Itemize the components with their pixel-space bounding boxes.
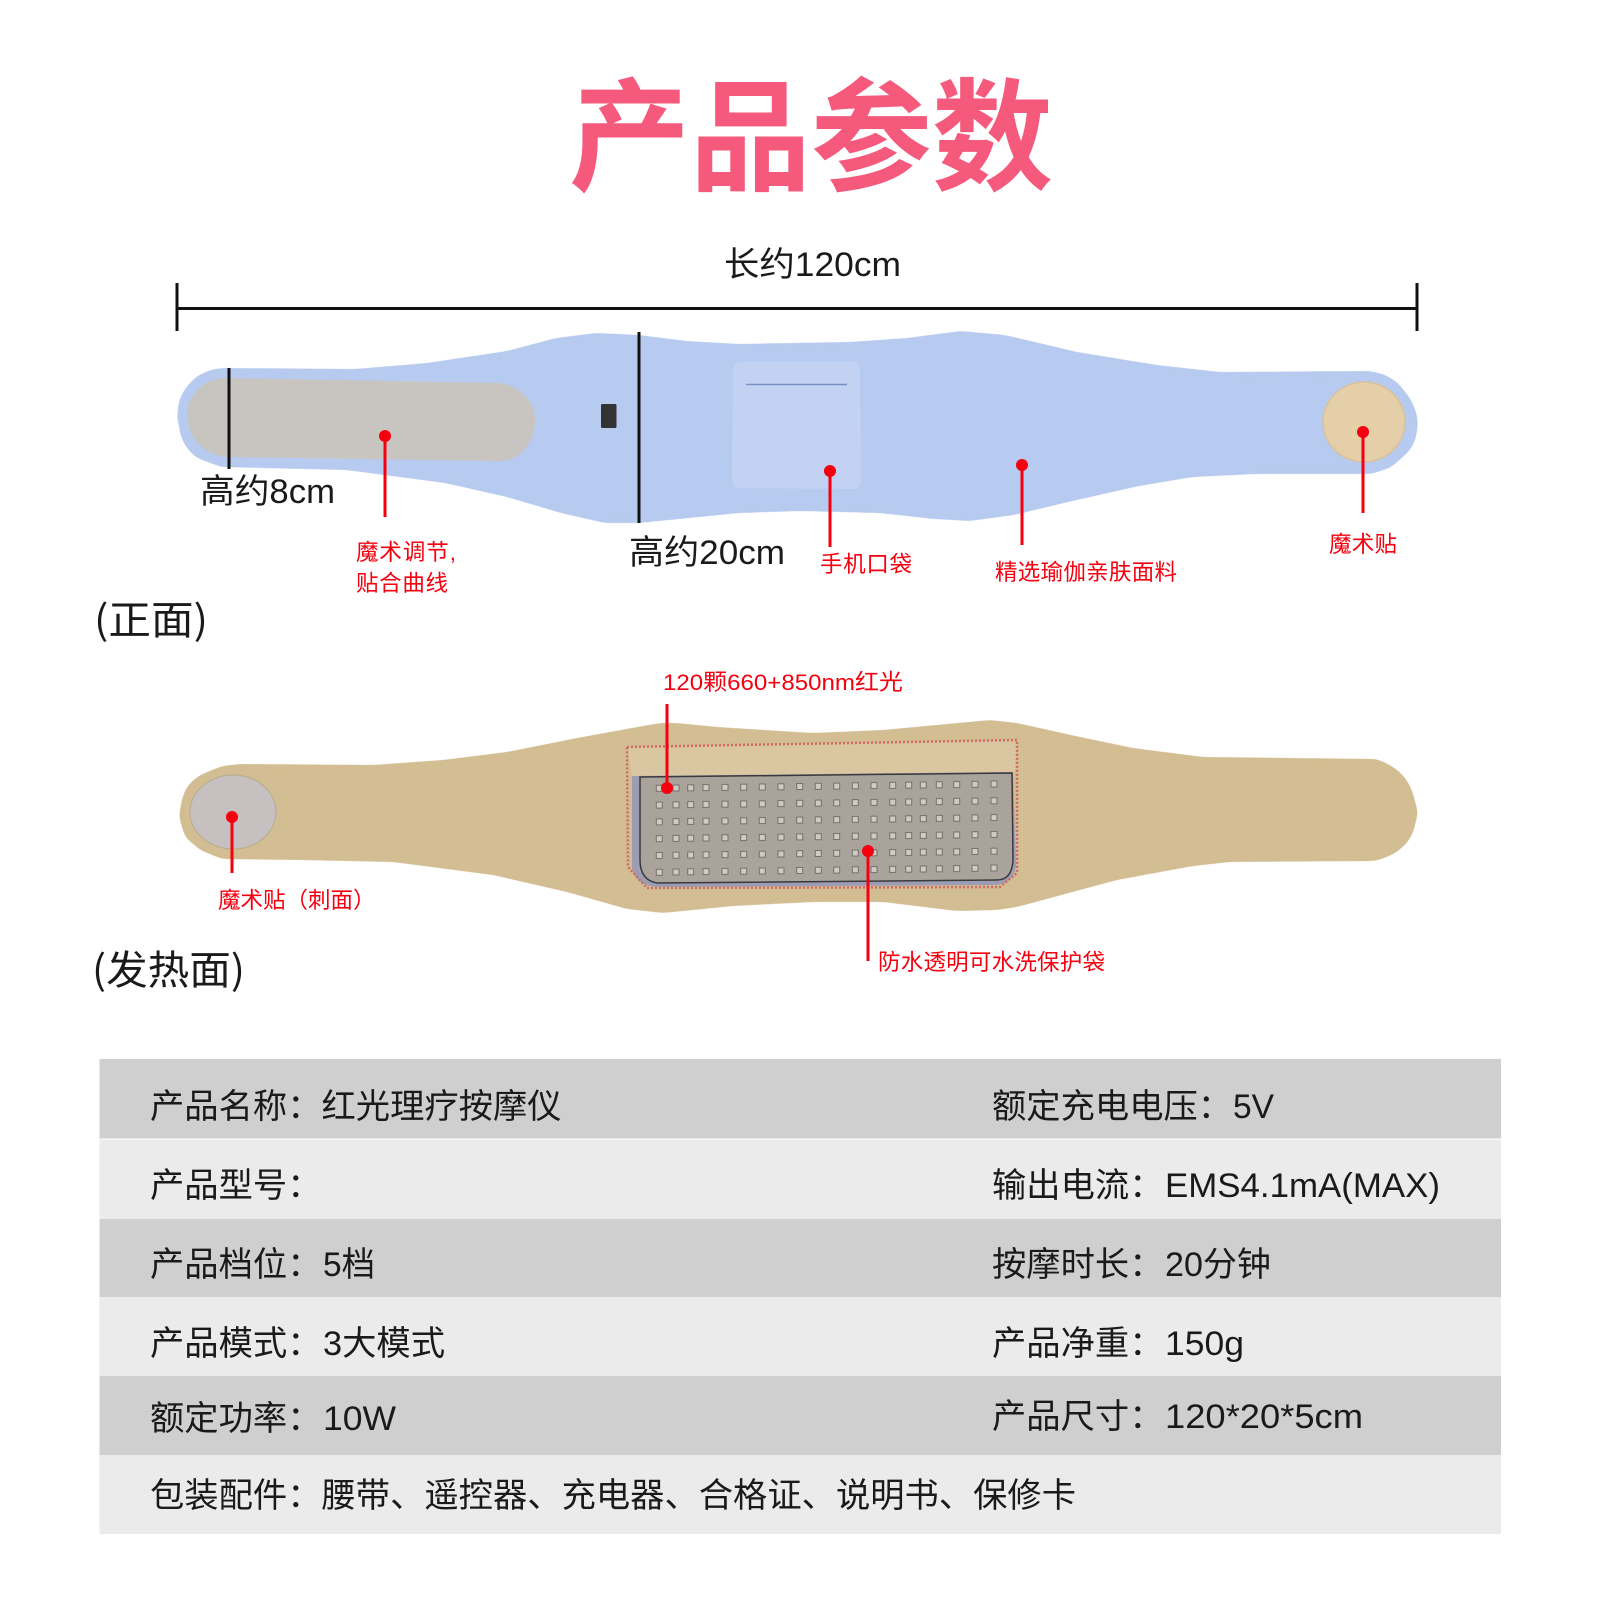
label: strap height: 高约8cm — [200, 473, 335, 511]
row 5 right: 120*20*5cm — [1165, 1398, 1363, 1436]
callout: yoga fabric — [995, 459, 1177, 585]
row 5 right — [992, 1398, 1363, 1436]
row 3 right: 按摩时长： — [992, 1246, 1164, 1284]
LED panel — [640, 773, 1013, 883]
height marker: centre — [638, 332, 640, 523]
row 5 left: 额定功率： — [150, 1400, 322, 1438]
row 2 left: 产品型号： — [150, 1167, 322, 1205]
height marker: strap — [228, 368, 230, 469]
row 3 left: 5档 — [323, 1246, 375, 1284]
table row backgrounds — [100, 1059, 1501, 1534]
callout: phone pocket: 手机口袋 — [820, 552, 912, 577]
heading: heating side: (发热面) — [92, 938, 245, 996]
waterproof pocket backing — [632, 772, 1016, 887]
callout: velcro strap: 贴合曲线 — [356, 571, 448, 596]
heading: front side: (正面) — [94, 588, 208, 646]
belt body: back — [179, 720, 1418, 913]
row 3 right — [992, 1246, 1271, 1284]
row 2 right — [992, 1167, 1440, 1205]
row 4 right: 产品净重： — [992, 1325, 1164, 1363]
callout: red light LEDs: 120颗660+850nm红光 — [663, 670, 903, 695]
dimension: overall length — [177, 246, 1417, 331]
callout: waterproof pocket: 防水透明可水洗保护袋 — [878, 950, 1105, 975]
row 5 left: 10W — [323, 1400, 397, 1438]
callout: waterproof pocket — [862, 845, 1105, 975]
gray hook patch — [190, 775, 276, 849]
callout: phone pocket — [820, 465, 912, 577]
callout: hook patch — [218, 811, 376, 913]
pocket stitching — [627, 740, 1017, 888]
callout: round velcro — [1329, 426, 1397, 557]
phone pocket — [732, 362, 861, 489]
callout: velcro strap: 魔术调节, — [356, 540, 456, 565]
callout: round velcro: 魔术贴 — [1329, 532, 1397, 557]
row 1 right: 5V — [1233, 1088, 1274, 1126]
callout: yoga fabric: 精选瑜伽亲肤面料 — [995, 560, 1177, 585]
row 4 right: 150g — [1165, 1325, 1244, 1363]
row 1 right: 额定充电电压： — [992, 1088, 1232, 1126]
label: centre height: 高约20cm — [629, 534, 785, 572]
row 4 right — [992, 1325, 1244, 1363]
LED grid — [656, 781, 997, 875]
row 4 left: 3大模式 — [323, 1325, 445, 1363]
row 3 right: 20分钟 — [1165, 1246, 1271, 1284]
row 5 right: 产品尺寸： — [992, 1398, 1164, 1436]
title: 产品参数 — [569, 40, 1053, 217]
front belt illustration — [177, 331, 1418, 523]
row 4 left — [150, 1325, 445, 1363]
control button — [601, 404, 616, 428]
panel outline — [640, 773, 1013, 883]
round velcro patch — [1323, 382, 1405, 462]
belt body: front — [177, 331, 1418, 523]
row 3 left: 产品档位： — [150, 1246, 322, 1284]
callout: hook patch: 魔术贴（刺面） — [218, 888, 376, 913]
row 1 left: 产品名称：红光理疗按摩仪 — [150, 1088, 562, 1126]
callout: velcro strap — [356, 430, 456, 596]
parameter table — [100, 1059, 1501, 1534]
callout: red light LEDs — [661, 670, 903, 794]
row 2 right: EMS4.1mA(MAX) — [1165, 1167, 1440, 1205]
velcro strap — [187, 378, 535, 461]
row 5 left — [150, 1400, 397, 1438]
pocket flap — [627, 740, 1017, 776]
back belt illustration — [179, 720, 1418, 913]
row 6 accessories: 包装配件：腰带、遥控器、充电器、合格证、说明书、保修卡 — [150, 1477, 1076, 1515]
row 4 left: 产品模式： — [150, 1325, 322, 1363]
row 2 right: 输出电流： — [992, 1167, 1164, 1205]
dimension: overall length: 长约120cm — [724, 246, 901, 284]
pocket slit — [746, 384, 847, 386]
